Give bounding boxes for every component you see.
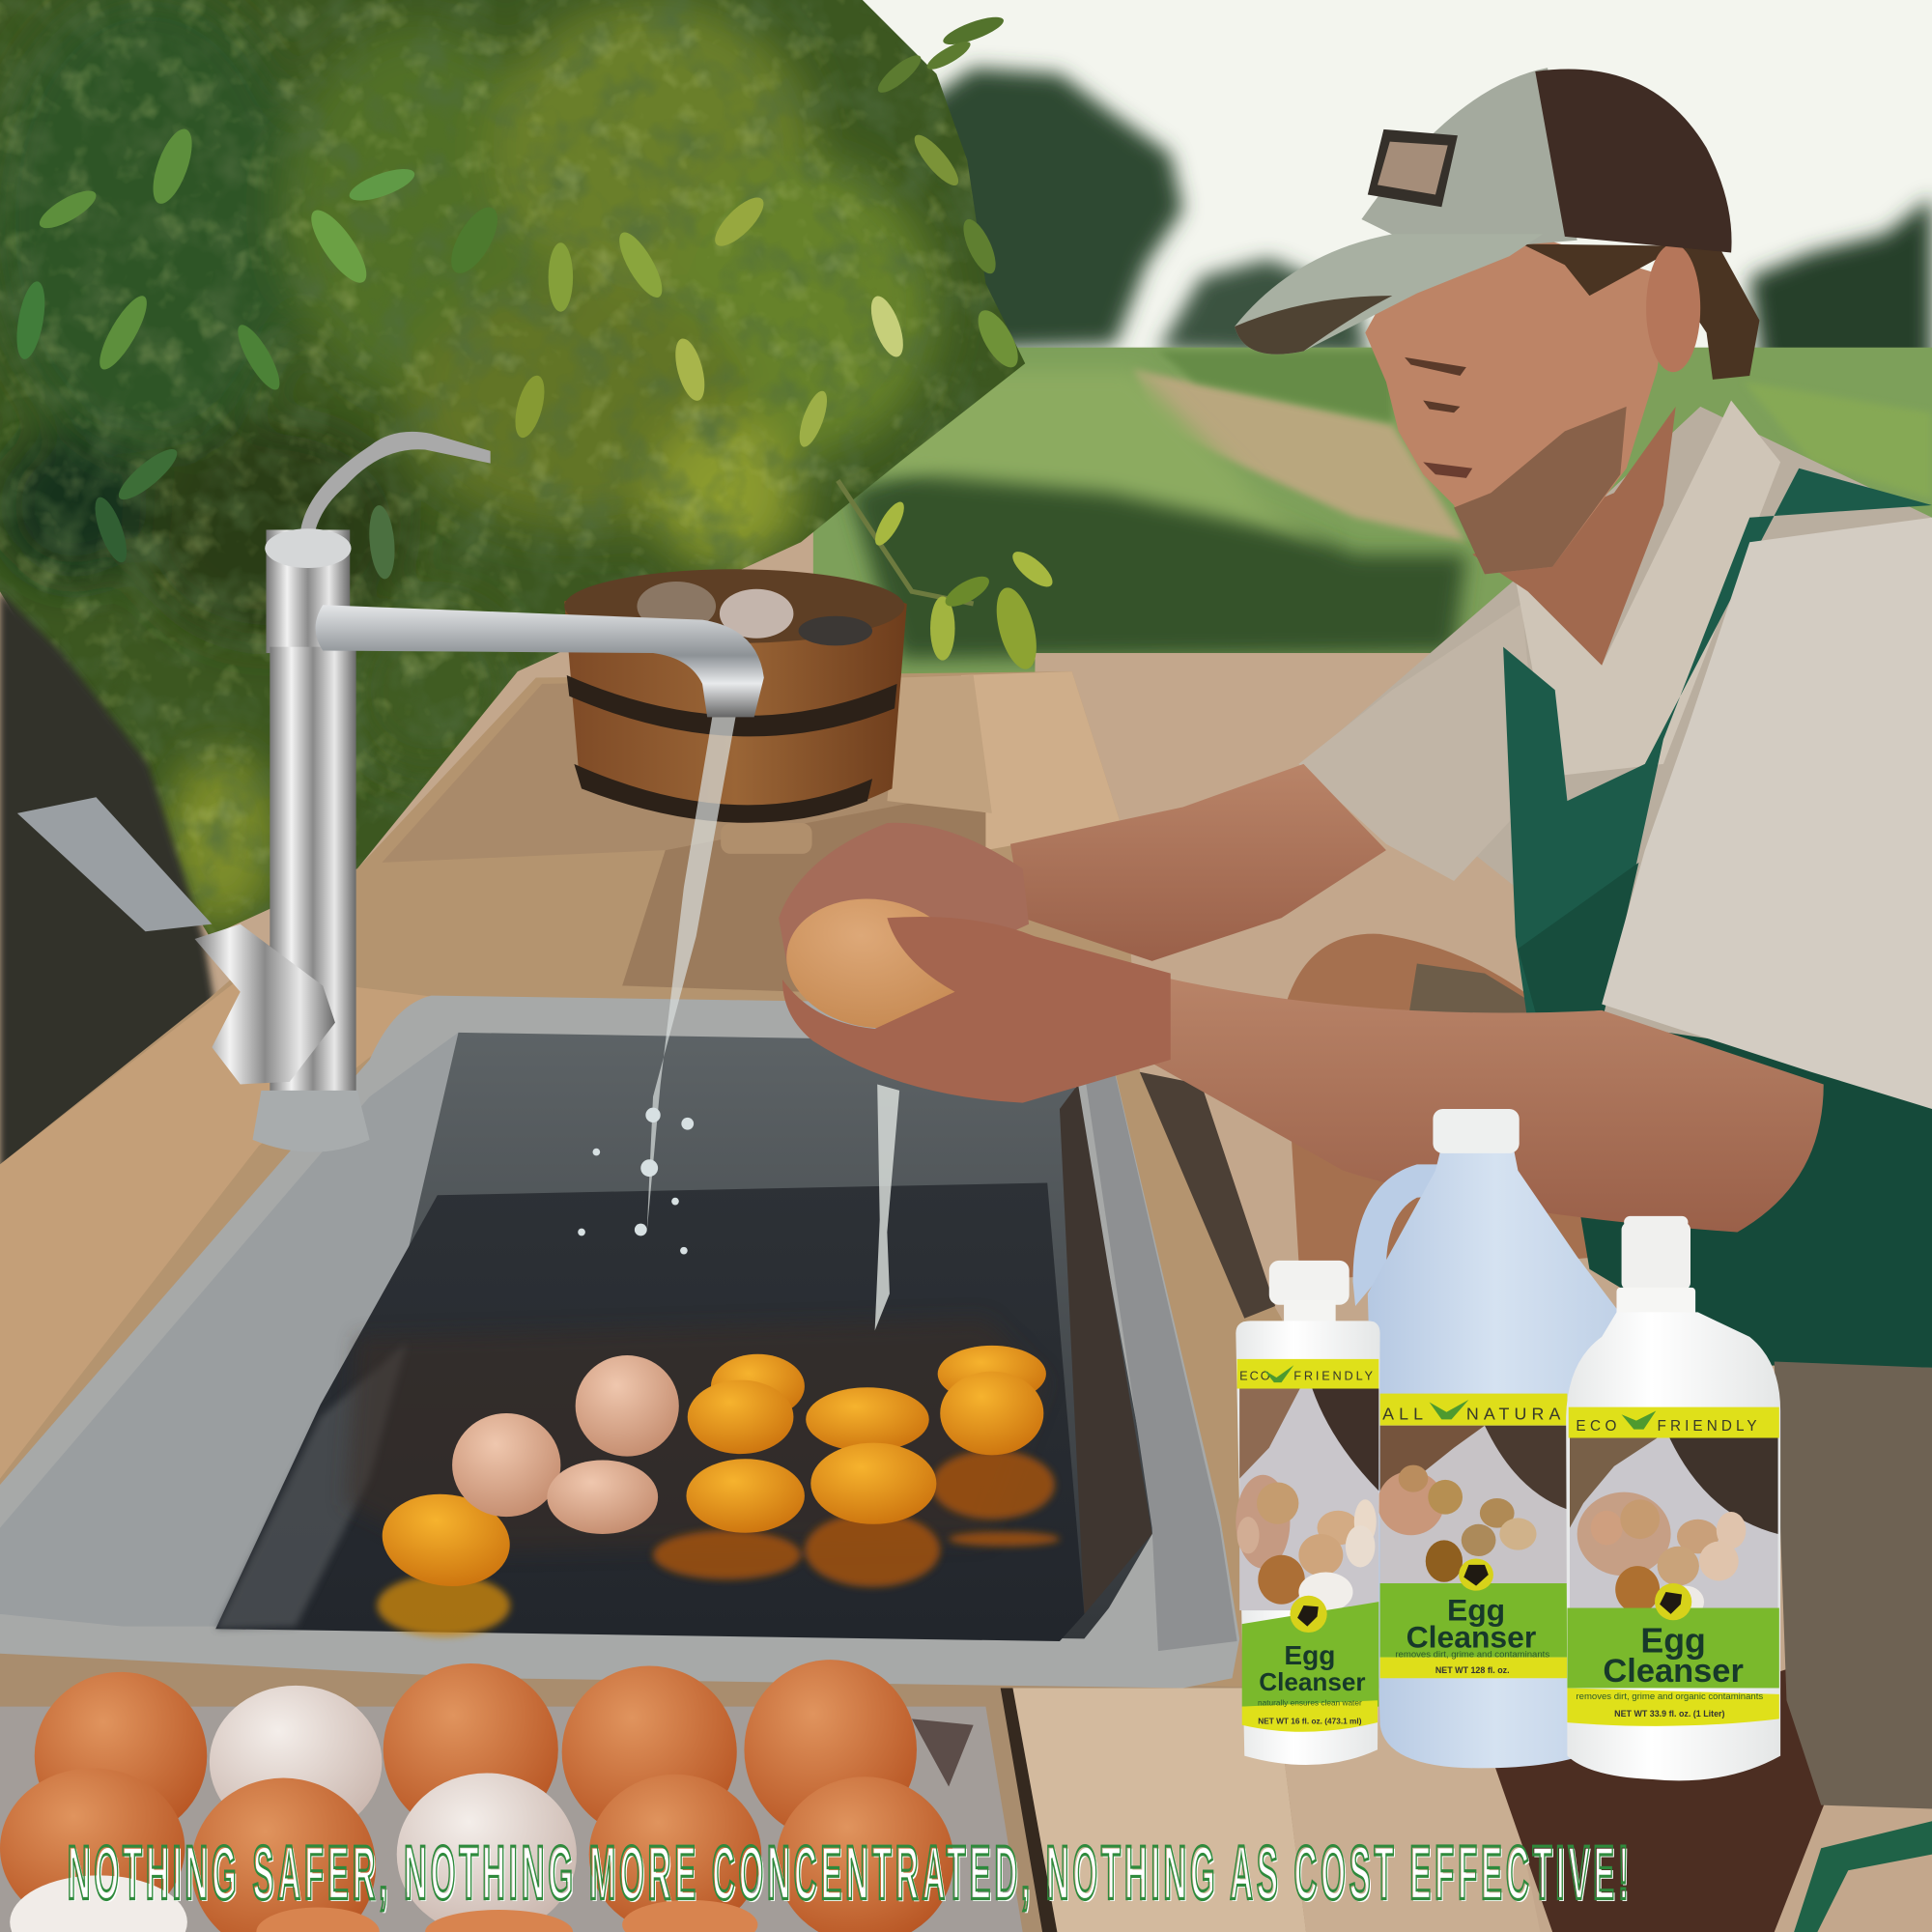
gallon: label: removes dirt, grime and contaminants (1395, 1650, 1549, 1661)
large bottle: label: ECO (1576, 1418, 1621, 1435)
man: collar (1516, 401, 1780, 777)
man: ear (1646, 244, 1700, 372)
man: lower leg (1493, 1663, 1836, 1932)
faucet: post (267, 529, 350, 653)
water stream from egg (875, 1084, 899, 1331)
wooden bucket (564, 569, 907, 854)
man: shirt torso (1331, 407, 1932, 1072)
background: foliage (0, 0, 1035, 949)
sink: inner basin (222, 1033, 1155, 1638)
man: knee and thigh (1284, 934, 1602, 1282)
large bottle: label: NET WT 33.9 fl. oz. (1 Liter) (1614, 1709, 1725, 1719)
background: distant trees (863, 68, 1932, 384)
background: green field (813, 348, 1932, 680)
gallon: label: NATURAL (1466, 1404, 1580, 1423)
large bottle: cap (1624, 1216, 1688, 1229)
sink: outer rim (0, 996, 1239, 1688)
faucet: top spout (300, 432, 491, 529)
product: gallon bottle (1353, 1109, 1624, 1768)
background: ground (1035, 653, 1932, 1932)
gallon: label: ALL (1382, 1404, 1428, 1423)
gallon: cap (1433, 1109, 1520, 1153)
faucet: lever (17, 797, 212, 931)
water stream from faucet (647, 717, 735, 1233)
background: sky (0, 0, 1932, 394)
small bottle: label: NET WT 16 fl. oz. (473.1 ml) (1258, 1716, 1362, 1725)
sink: water (215, 1182, 1084, 1641)
faucet (17, 432, 764, 1152)
gallon: label: NET WT 128 fl. oz. (1435, 1665, 1510, 1675)
slogan: NOTHING SAFER, NOTHING MORE CONCENTRATED, NOTHING AS COST EFFECTIVE! (68, 1830, 1629, 1916)
man: right sleeve (1602, 518, 1932, 1109)
man: eye and brow (1405, 357, 1466, 412)
large bottle: label: Cleanser (1603, 1653, 1744, 1690)
egg held in hands (778, 888, 972, 1039)
man: stool (1794, 1821, 1932, 1932)
large bottle: label (1567, 1407, 1779, 1726)
man: apron bib (1503, 469, 1932, 1023)
table: lower planks (0, 1651, 1528, 1932)
egg carton (0, 1660, 1023, 1932)
man: mouth (1423, 462, 1472, 478)
faucet: base (252, 1091, 370, 1152)
wooden table (0, 671, 1540, 1932)
small bottle: label: ECO (1239, 1369, 1272, 1383)
large bottle: label: FRIENDLY (1658, 1418, 1761, 1435)
faucet: long spout (316, 605, 764, 717)
small bottle: label: Cleanser (1259, 1667, 1366, 1696)
gallon: handle (1353, 1164, 1448, 1306)
product: small bottle (1236, 1261, 1380, 1765)
gallon: label: Egg (1447, 1592, 1505, 1627)
man: shorts (1775, 1361, 1932, 1808)
small bottle: label: naturally ensures clean water (1258, 1697, 1362, 1707)
man: right arm (1146, 974, 1824, 1233)
small bottle: body (1236, 1321, 1380, 1765)
plant sprig beside bucket (838, 480, 1058, 673)
carton: eggs (0, 1660, 953, 1932)
gallon: label (1378, 1394, 1580, 1678)
large bottle: body (1566, 1312, 1780, 1780)
sink: eggs in water (376, 1346, 1046, 1594)
man: face (1365, 234, 1669, 574)
sink: right wall (1060, 1084, 1152, 1614)
gallon: label: Cleanser (1406, 1619, 1536, 1654)
small bottle: label: FRIENDLY (1293, 1369, 1376, 1383)
sink: left wall (0, 1033, 458, 1627)
man (778, 68, 1932, 1932)
man: front hand (782, 917, 1171, 1103)
background: dark rock (0, 591, 215, 1182)
man: neck (1472, 407, 1676, 666)
man: left sleeve (1298, 604, 1540, 881)
small bottle: cap (1269, 1261, 1350, 1305)
large bottle: label: Egg (1640, 1621, 1706, 1660)
product: large bottle (1566, 1216, 1780, 1780)
man: left arm (1010, 764, 1386, 961)
small bottle: label: Egg (1284, 1640, 1335, 1670)
gallon: jug body (1368, 1146, 1624, 1768)
sink: egg reflections (377, 1450, 1060, 1636)
foliage: leaves (12, 12, 1026, 580)
man: cap badge (1368, 129, 1458, 207)
man: hair (1521, 244, 1759, 380)
large bottle: label: removes dirt, grime and organic contaminants (1576, 1691, 1763, 1702)
water splashes (578, 1108, 694, 1254)
slogan: NOTHING SAFER, NOTHING MORE CONCENTRATED, NOTHING AS COST EFFECTIVE! (69, 1832, 1631, 1918)
man: lower apron (1540, 974, 1932, 1368)
small bottle: label (1236, 1359, 1378, 1732)
man: back hand (779, 823, 1029, 974)
man: cap (1235, 68, 1732, 355)
sink (0, 996, 1239, 1688)
